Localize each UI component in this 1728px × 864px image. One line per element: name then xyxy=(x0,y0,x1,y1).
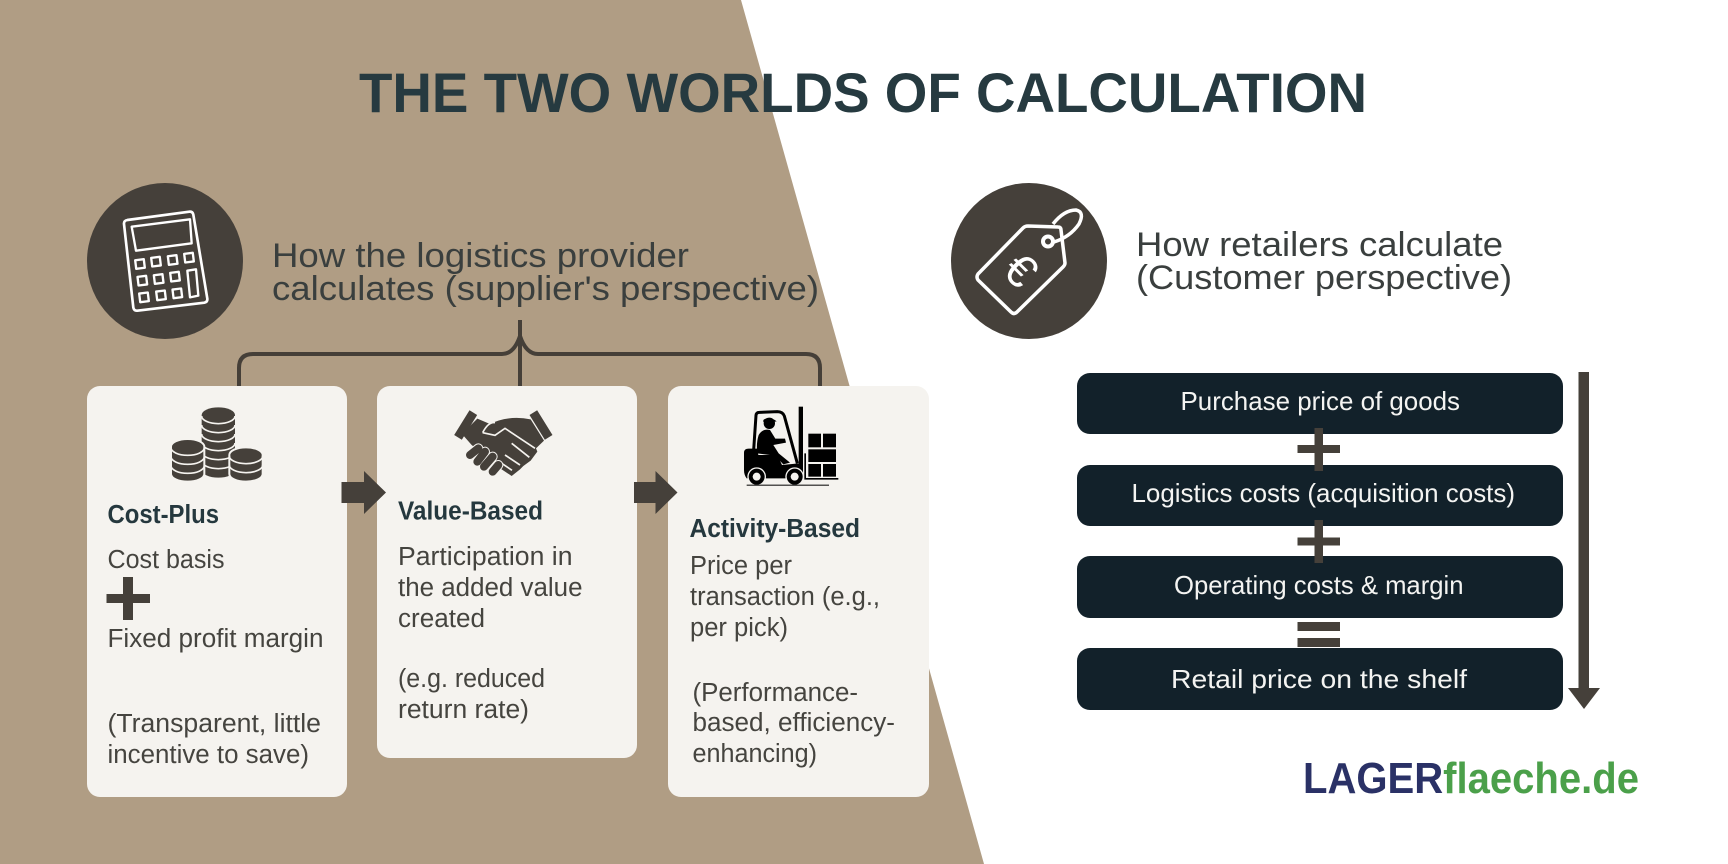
box: Retail price on the shelf xyxy=(1077,648,1563,710)
card heading: Value-Based: Value-Based xyxy=(398,498,543,526)
icon: plus 2 xyxy=(1298,520,1340,563)
box: Logistics costs xyxy=(1077,465,1563,526)
text: activity-based description: transaction (e.g., xyxy=(690,583,880,611)
text: value-based description xyxy=(398,543,582,633)
panel: Value-Based xyxy=(377,386,637,758)
text: Cost basis: Cost basis xyxy=(108,546,224,574)
icon: handshake xyxy=(458,413,549,476)
logo: LAGERflaeche.de xyxy=(1303,754,1639,803)
text: value-based note: (e.g. reduced xyxy=(398,665,545,693)
icon: equals xyxy=(1298,622,1340,647)
text: value-based note: return rate) xyxy=(398,696,529,724)
text: value-based description: the added value xyxy=(398,574,582,602)
background: tan diagonal panel xyxy=(0,0,984,864)
panel: Activity-Based xyxy=(668,386,929,797)
heading: customer perspective: How retailers calculate xyxy=(1136,226,1503,264)
box: Operating costs and margin xyxy=(1077,556,1563,618)
box: Operating costs and margin: Operating costs & margin xyxy=(1174,570,1464,600)
heading: supplier perspective: calculates (supplier's perspective) xyxy=(272,270,819,308)
text: activity-based description: Price per xyxy=(690,552,792,580)
text: cost-plus note: incentive to save) xyxy=(108,741,309,769)
arrow: Value-Based to Activity-Based xyxy=(634,471,678,514)
icon: coins xyxy=(171,407,263,482)
card heading: Cost-Plus: Cost-Plus xyxy=(108,501,219,529)
bracket connecting heading to three cards xyxy=(239,320,820,386)
panel: retail price stack xyxy=(1077,373,1563,710)
box: Purchase price of goods xyxy=(1077,373,1563,434)
text: value-based description: Participation in xyxy=(398,543,572,571)
text: activity-based note: (Performance- xyxy=(692,679,858,707)
heading: customer perspective xyxy=(1136,226,1512,297)
text: value-based description: created xyxy=(398,605,485,633)
text: activity-based description xyxy=(690,552,880,642)
icon: forklift xyxy=(744,407,838,486)
icon: price tag xyxy=(951,183,1107,339)
text: value-based note xyxy=(398,665,545,724)
text: activity-based description: per pick) xyxy=(690,614,788,642)
text: cost-plus note: (Transparent, little xyxy=(108,710,321,738)
text: Fixed profit margin: Fixed profit margin xyxy=(108,625,324,653)
icon: plus 1 xyxy=(1298,428,1340,471)
icon: plus xyxy=(106,577,150,620)
text: activity-based note xyxy=(692,679,895,768)
arrow: Cost-Plus to Value-Based xyxy=(342,471,386,514)
box: Purchase price of goods: Purchase price of goods xyxy=(1180,386,1460,416)
box: Logistics costs: Logistics costs (acquisition costs) xyxy=(1132,478,1515,508)
text: cost-plus note xyxy=(108,710,321,769)
panel: Cost-Plus xyxy=(87,386,347,797)
text: activity-based note: based, efficiency- xyxy=(692,709,895,737)
icon: calculator xyxy=(87,183,243,339)
heading: supplier perspective xyxy=(272,237,819,308)
icon: price tag: € xyxy=(994,243,1048,297)
text: activity-based note: enhancing) xyxy=(692,740,817,768)
title: THE TWO WORLDS OF CALCULATION xyxy=(359,61,1367,124)
heading: customer perspective: (Customer perspective) xyxy=(1136,259,1512,297)
arrow: downward flow xyxy=(1568,372,1600,709)
heading: supplier perspective: How the logistics provider xyxy=(272,237,689,275)
box: Retail price on the shelf: Retail price on the shelf xyxy=(1171,664,1468,694)
card heading: Activity-Based: Activity-Based xyxy=(690,515,860,543)
